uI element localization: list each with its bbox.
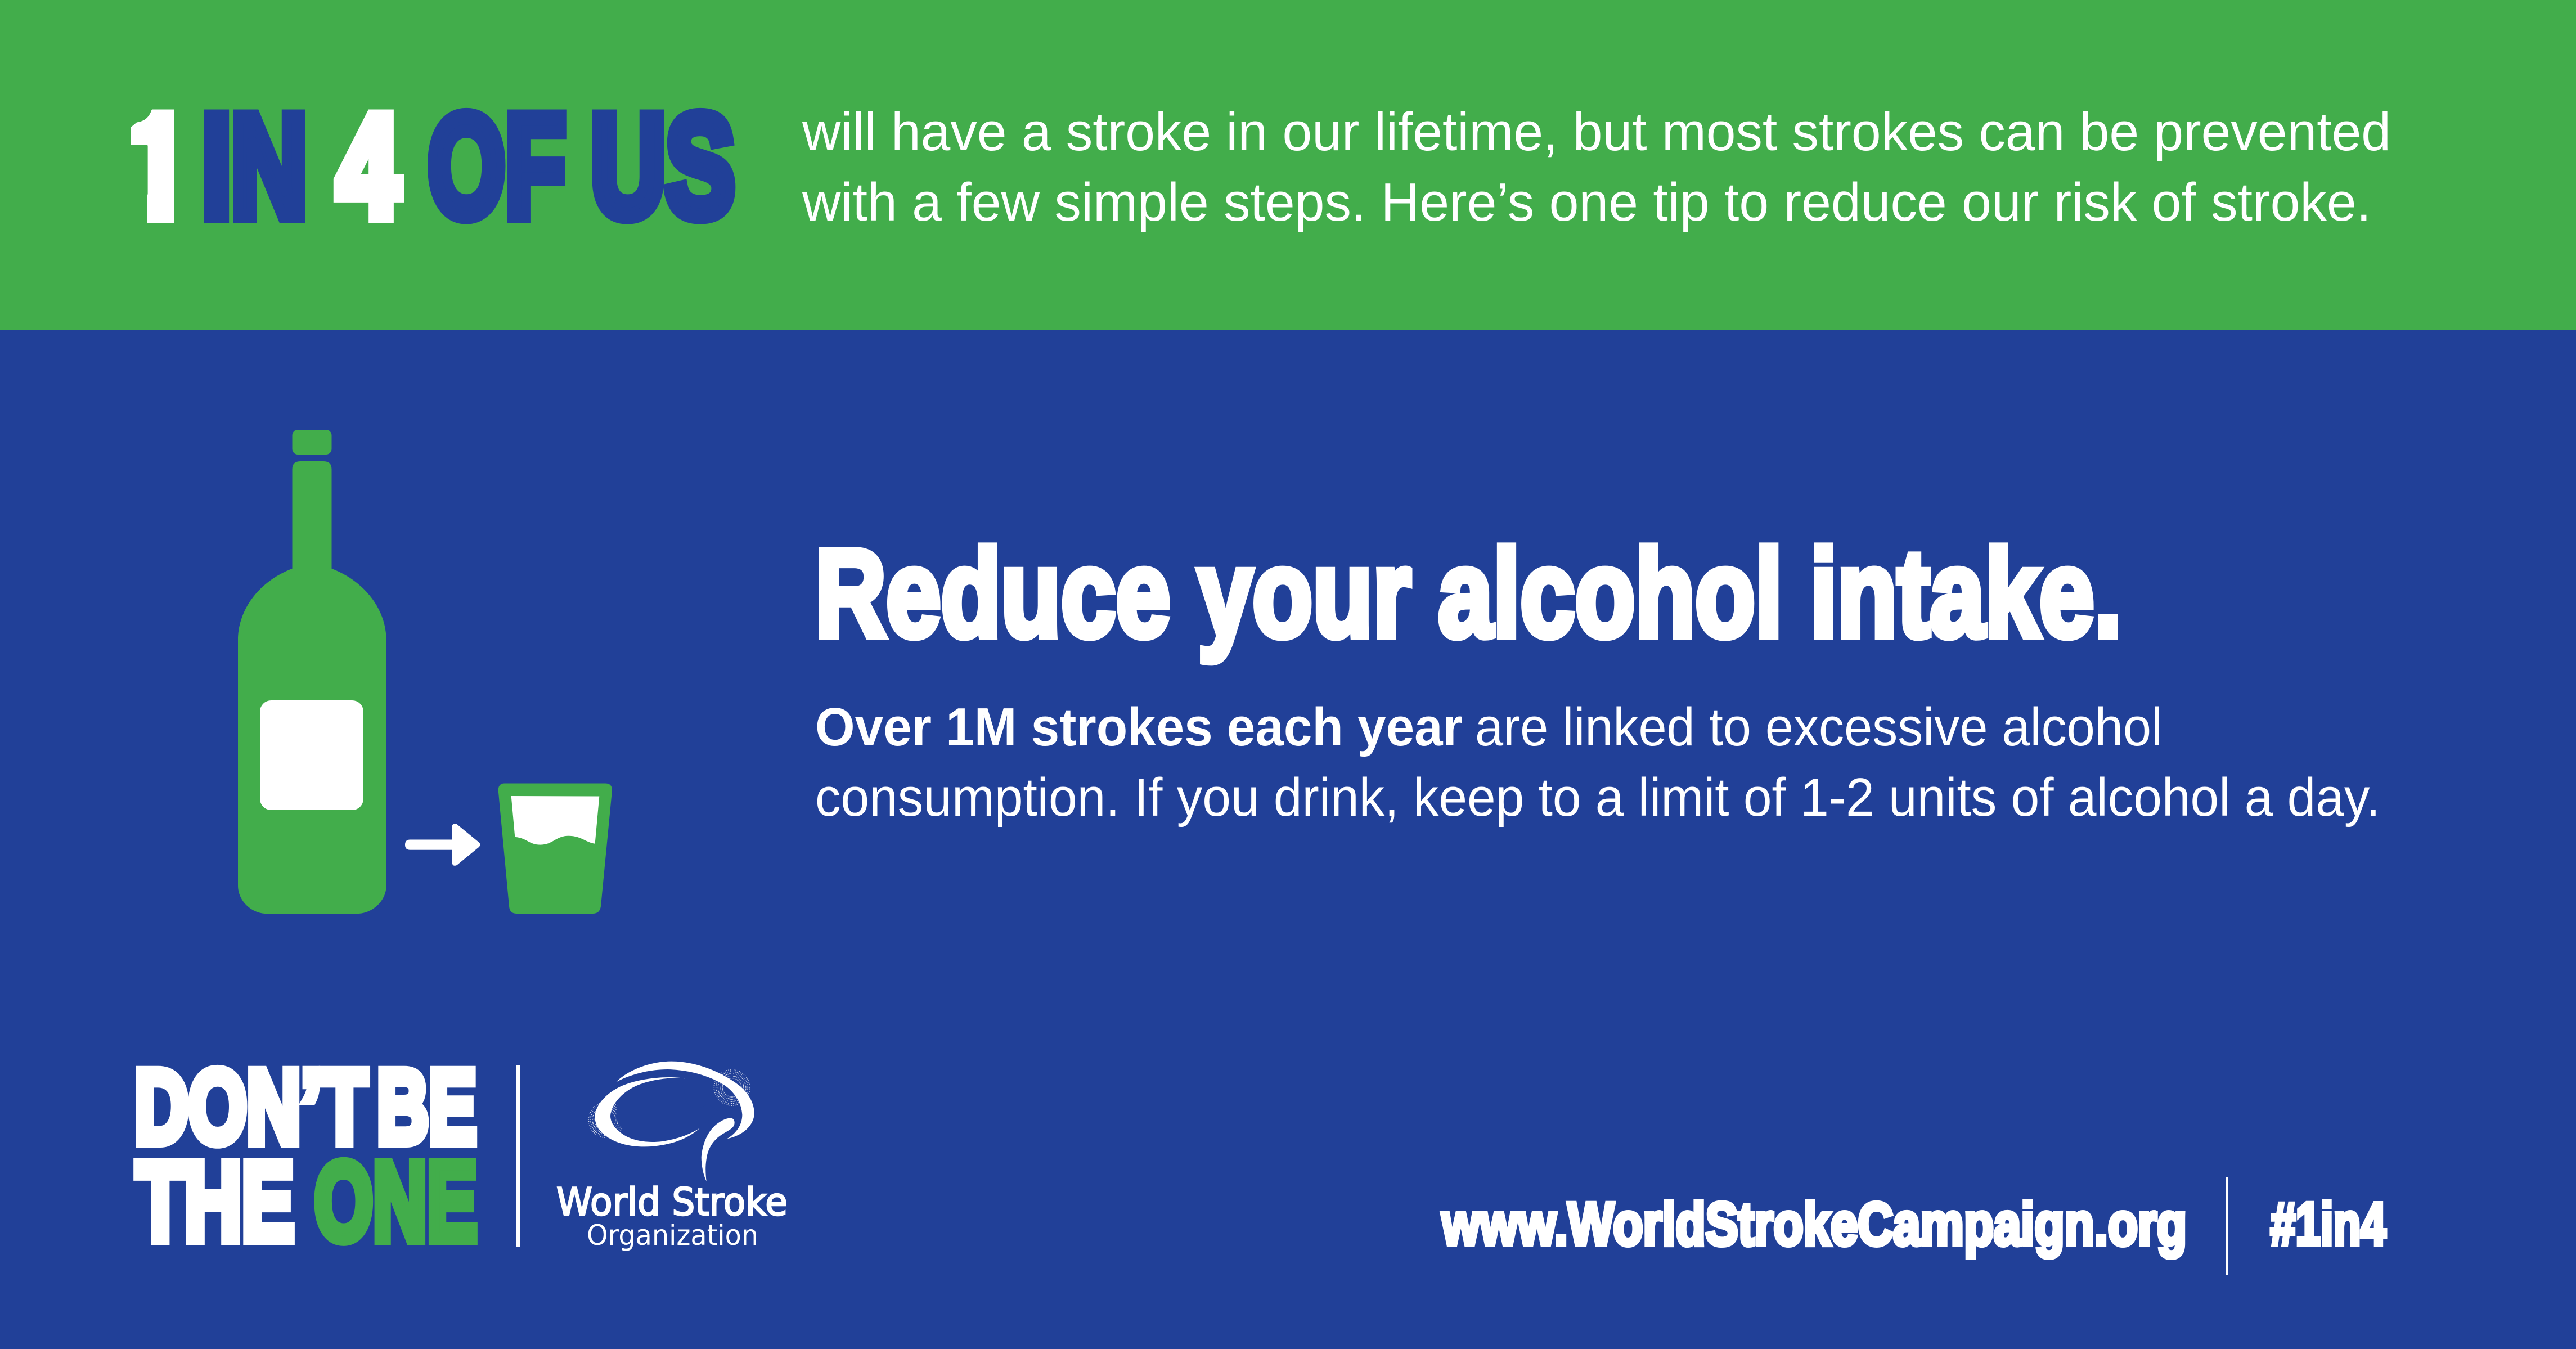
header text block [802, 102, 2391, 232]
icon: empty part of the glass [511, 796, 599, 845]
text block: statistic and advice: are linked to excessive alcohol [1475, 697, 2163, 757]
header slogan: 1 in 4 of us [131, 108, 736, 224]
logo: dont be the one: BE [377, 1049, 476, 1165]
heading: reduce your alcohol intake: Reduce your alcohol intake. [815, 524, 2121, 663]
logo: dont be the one: THE [136, 1139, 294, 1263]
text block: statistic and advice: Over 1M strokes each year [815, 697, 1463, 757]
header slogan: 1 in 4 of us: OF [428, 84, 565, 247]
icon: bottle cap [293, 430, 332, 455]
icon: glass [498, 783, 612, 914]
text block: statistic and advice [815, 697, 2380, 828]
header slogan: 1 in 4 of us: US [591, 84, 735, 247]
logo text: world stroke: World Stroke [556, 1180, 788, 1225]
logo: dont be the one [134, 1049, 477, 1263]
website url: www.WorldStrokeCampaign.org [1441, 1190, 2187, 1258]
icon: bottle label [260, 700, 363, 810]
header slogan: 1 in 4 of us: 4 [337, 84, 400, 247]
icon: wine bottle [238, 461, 386, 914]
divider between logos [516, 1065, 520, 1247]
logo: world stroke organization [556, 1062, 788, 1252]
logo mark: brain swoosh [588, 1062, 754, 1181]
divider before hashtag [2226, 1177, 2228, 1275]
icon: bottle and glass [238, 430, 612, 914]
header text block: will have a stroke in our lifetime, but most strokes can be prevented [802, 102, 2391, 162]
logo: dont be the one: ONE [314, 1139, 477, 1263]
arrow: bottle to glass [405, 824, 480, 866]
header text block: with a few simple steps. Here’s one tip to reduce our risk of stroke. [802, 172, 2371, 232]
panel: green header band [0, 0, 2576, 330]
text block: statistic and advice: consumption. If you drink, keep to a limit of 1-2 units of alcohol a day. [815, 767, 2380, 828]
header slogan: 1 in 4 of us: IN [202, 84, 307, 247]
hashtag: #1in4 [2271, 1190, 2386, 1258]
logo text: organization: Organization [587, 1219, 758, 1252]
header slogan: 1 in 4 of us: 1 [127, 84, 190, 247]
logo: dont be the one: DON’T [134, 1049, 367, 1165]
